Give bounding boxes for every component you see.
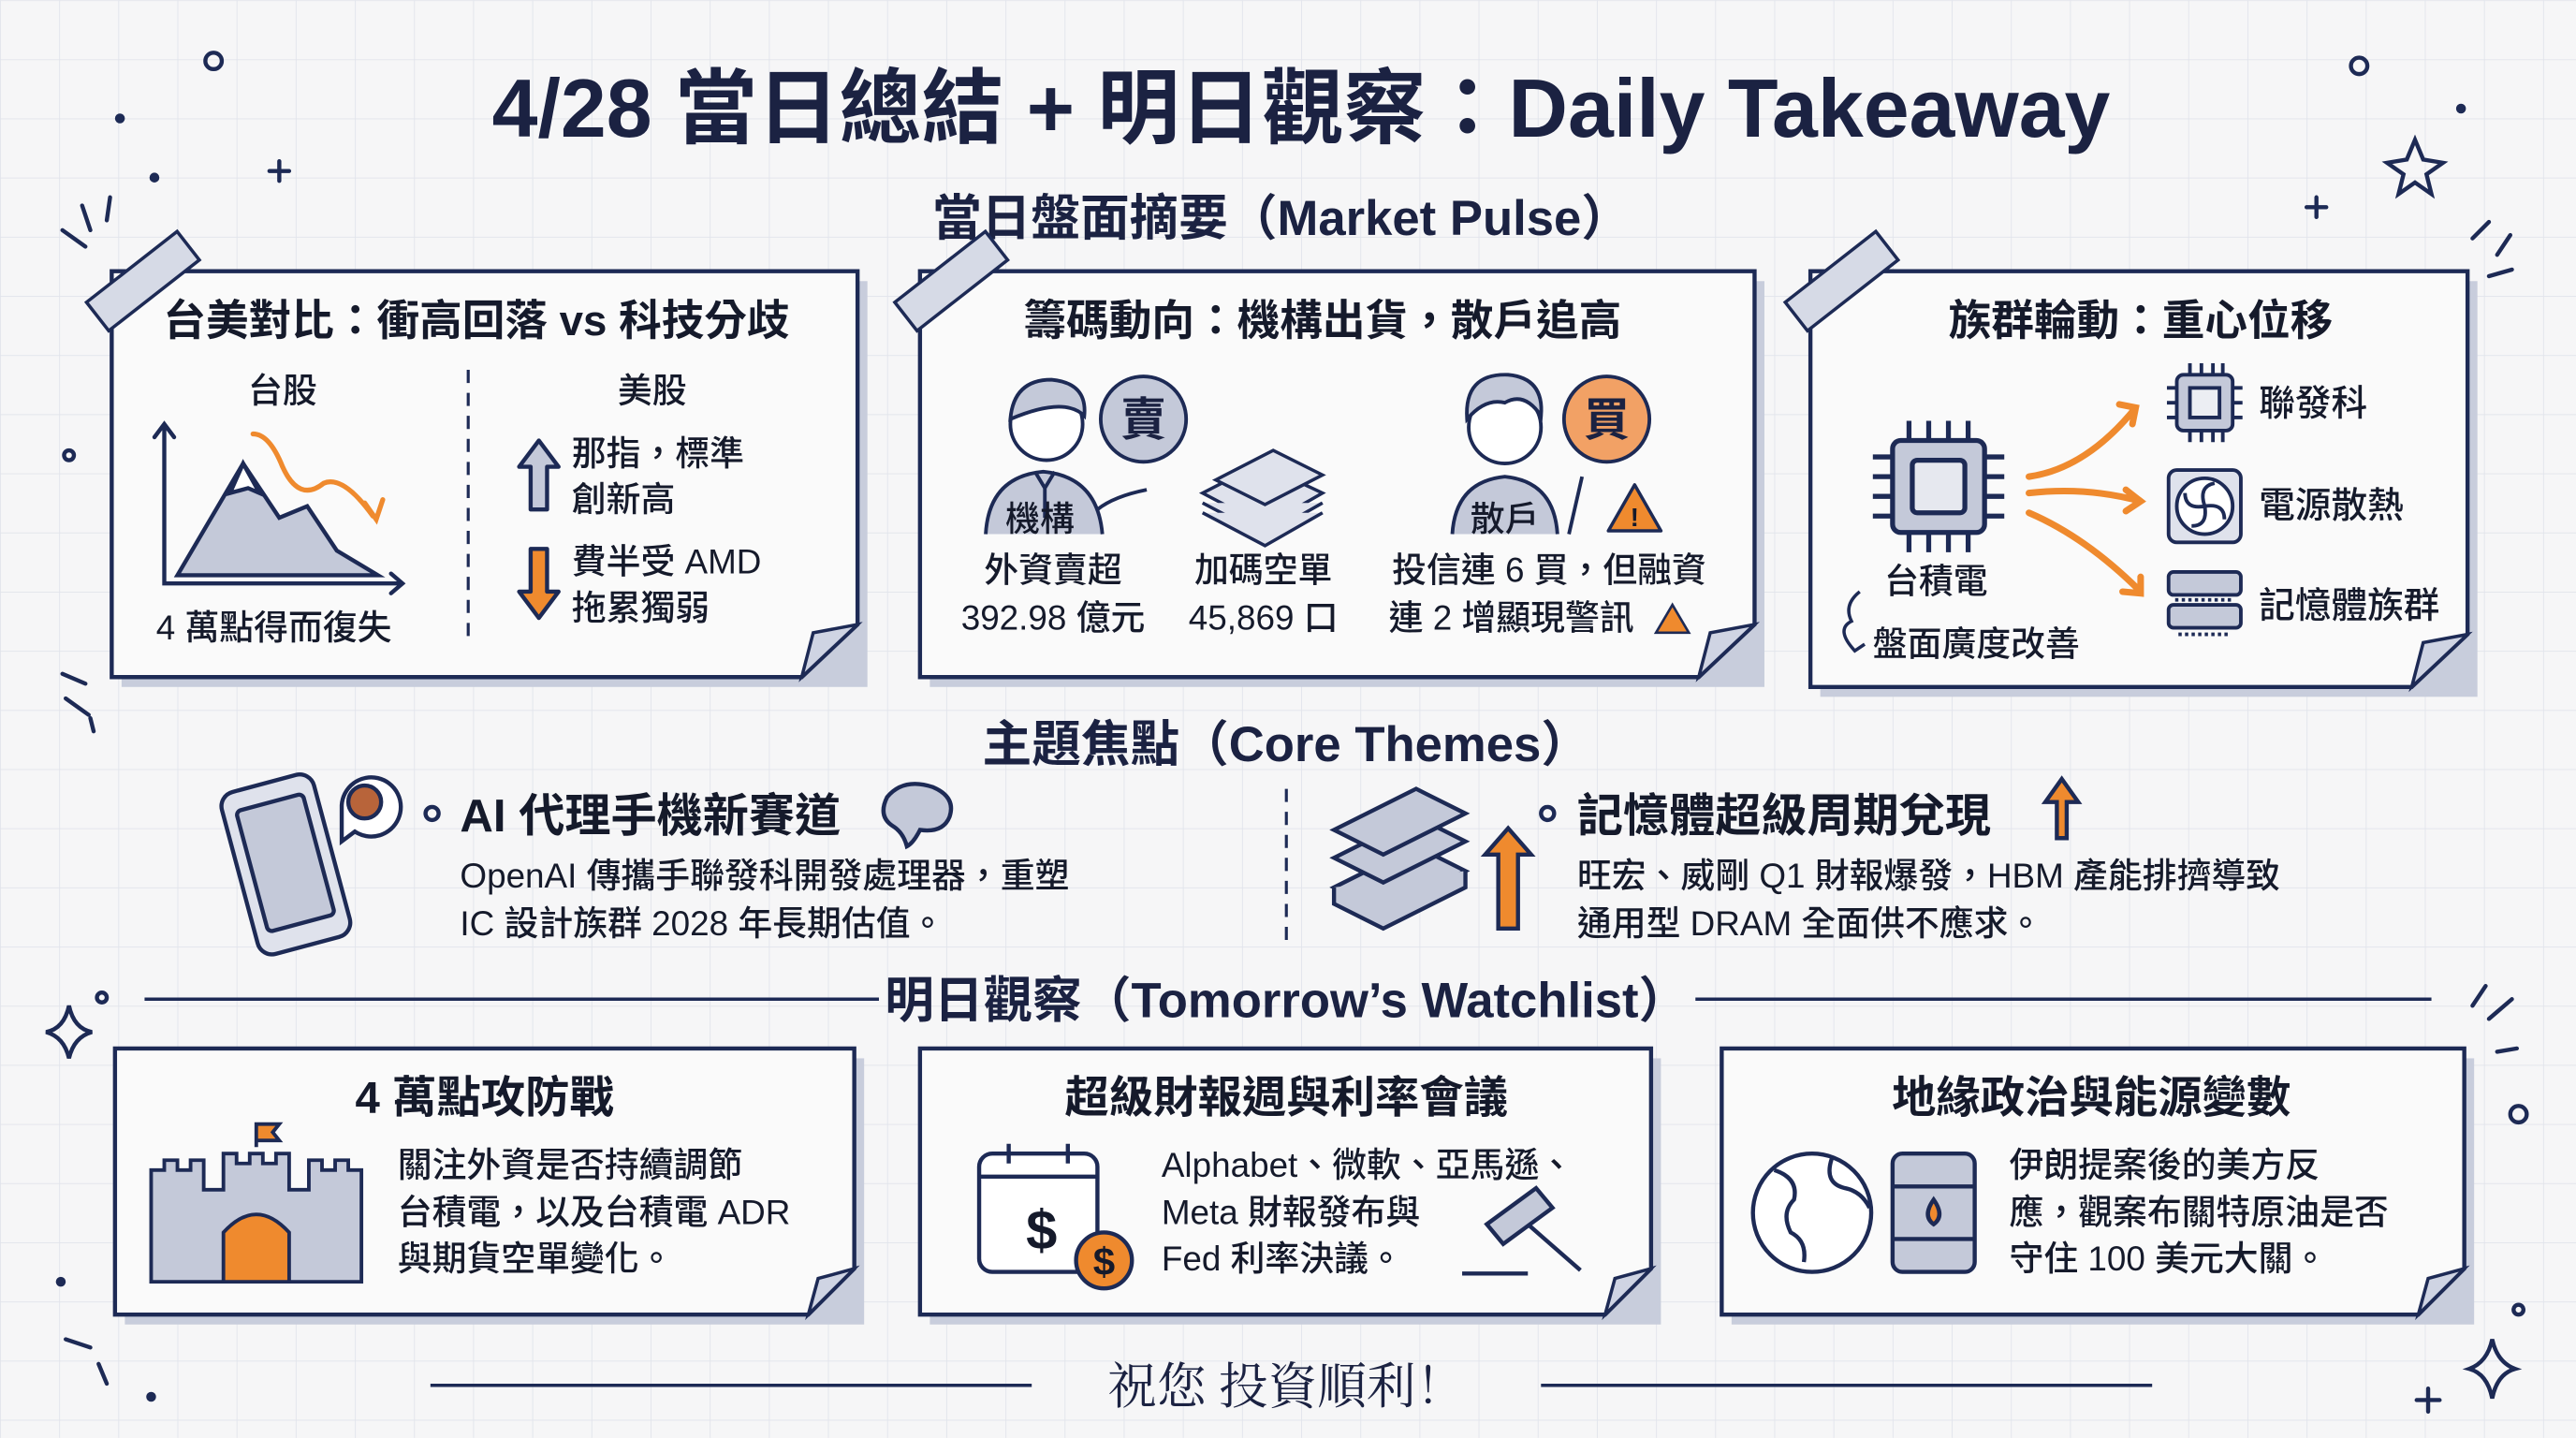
panel: 台美對比: 美股 — [618, 372, 687, 410]
panel: 台美對比: 那指，標準 — [572, 434, 744, 473]
panel: 籌碼動向: 連 2 增顯現警訊 — [1389, 598, 1634, 637]
panel: 4萬點攻防戰: 與期貨空單變化。 — [398, 1240, 674, 1278]
icon: big chip — [1873, 420, 2004, 552]
theme: AI phone: AI 代理手機新賽道 — [460, 791, 841, 842]
panel: 籌碼動向: 散戶 — [1471, 500, 1540, 538]
panel: 籌碼動向: 外資賣超 — [984, 550, 1122, 589]
panel: 籌碼動向 — [895, 231, 1764, 687]
panel: 財報週: Alphabet、微軟、亞馬遜、 — [1162, 1146, 1573, 1184]
panel: 籌碼動向: 買 — [1584, 395, 1630, 446]
panel: 籌碼動向: 45,869 口 — [1189, 598, 1339, 637]
panel: 台美對比: 費半受 AMD — [572, 543, 761, 581]
icon: money stack — [1203, 450, 1323, 546]
panel: 族群輪動: 族群輪動：重心位移 — [1949, 297, 2333, 345]
panel: 族群輪動: 台積電 — [1884, 563, 1988, 601]
icon: retail person — [1453, 374, 1649, 535]
panel: 族群輪動: 聯發科 — [2259, 384, 2367, 424]
theme: memory — [1334, 779, 2280, 943]
icon: warning — [1608, 485, 1661, 531]
panel: 籌碼動向: 賣 — [1120, 395, 1166, 446]
panel: 台美對比 — [86, 231, 868, 687]
panel: 籌碼動向: 392.98 億元 — [961, 598, 1145, 637]
panel: 族群輪動 — [1785, 231, 2478, 697]
panel: 財報週: Meta 財報發布與 — [1162, 1194, 1420, 1232]
panel: 4萬點攻防戰: 關注外資是否持續調節 — [398, 1146, 742, 1184]
theme: AI phone: OpenAI 傳攜手聯發科開發處理器，重塑 — [460, 857, 1069, 895]
panel: 4萬點攻防戰 — [115, 1049, 864, 1325]
theme: memory: 記憶體超級周期兌現 — [1577, 791, 1991, 842]
panel: 籌碼動向: 籌碼動向：機構出貨，散戶追高 — [1023, 297, 1621, 345]
panel: 財報週: $ — [1093, 1240, 1115, 1284]
panel: 財報週: Fed 利率決議。 — [1162, 1240, 1403, 1278]
panel: 台美對比: 創新高 — [572, 480, 675, 519]
theme: AI phone: IC 設計族群 2028 年長期估值。 — [460, 904, 944, 943]
panel: 族群輪動: 記憶體族群 — [2259, 586, 2439, 626]
icon: small chip — [2167, 363, 2243, 635]
panel: 地緣政治: 應，觀案布關特原油是否 — [2009, 1194, 2389, 1232]
panel: 地緣政治: 守住 100 美元大關。 — [2009, 1240, 2327, 1278]
title: 4/28 當日總結 + 明日觀察：Daily Takeaway — [492, 63, 2111, 154]
panel: 台美對比: 拖累獨弱 — [572, 589, 710, 627]
panel: 族群輪動: 電源散熱 — [2259, 486, 2404, 526]
panel: 4萬點攻防戰: 4 萬點攻防戰 — [356, 1073, 614, 1123]
heading: market pulse: 當日盤面摘要（Market Pulse） — [932, 191, 1631, 246]
theme: AI phone — [218, 771, 1069, 958]
panel: 台美對比: 台股 — [248, 372, 317, 410]
footer: 祝您 投資順利！ — [1107, 1347, 1465, 1418]
panel: 籌碼動向: 投信連 6 買，但融資 — [1392, 550, 1706, 589]
panel: 籌碼動向: ! — [1631, 503, 1639, 532]
panel: 地緣政治: 伊朗提案後的美方反 — [2009, 1146, 2320, 1184]
theme: memory: 通用型 DRAM 全面供不應求。 — [1577, 904, 2042, 943]
heading: core themes: 主題焦點（Core Themes） — [983, 717, 1590, 772]
icon: calendar — [979, 1144, 1580, 1288]
panel title: 台美對比：衝高回落 vs 科技分歧 — [163, 297, 790, 345]
icon: institution person — [986, 376, 1186, 535]
icon: castle — [151, 1124, 361, 1282]
panel: 財報週 — [920, 1049, 1661, 1325]
panel: 族群輪動: 盤面廣度改善 — [1873, 624, 2080, 663]
icon: globe and barrel — [1753, 1153, 1975, 1272]
panel: 財報週: 超級財報週與利率會議 — [1064, 1073, 1508, 1123]
theme: memory: 旺宏、威剛 Q1 財報爆發，HBM 產能排擠導致 — [1577, 857, 2280, 895]
panel: 地緣政治 — [1721, 1049, 2474, 1325]
panel: 台美對比: 4 萬點得而復失 — [156, 609, 392, 647]
panel: 4萬點攻防戰: 台積電，以及台積電 ADR — [398, 1194, 790, 1232]
panel: 籌碼動向: 機構 — [1005, 500, 1075, 538]
panel: 財報週: $ — [1026, 1198, 1057, 1261]
panel: 籌碼動向: 加碼空單 — [1194, 550, 1332, 589]
icon: down arrow — [520, 549, 559, 618]
arrows: orange — [2029, 404, 2141, 594]
panel: 地緣政治: 地緣政治與能源變數 — [1892, 1073, 2291, 1123]
heading: watchlist: 明日觀察（Tomorrow’s Watchlist） — [885, 974, 1688, 1029]
chart: mountain — [154, 424, 402, 594]
icon: up arrow — [520, 441, 559, 509]
